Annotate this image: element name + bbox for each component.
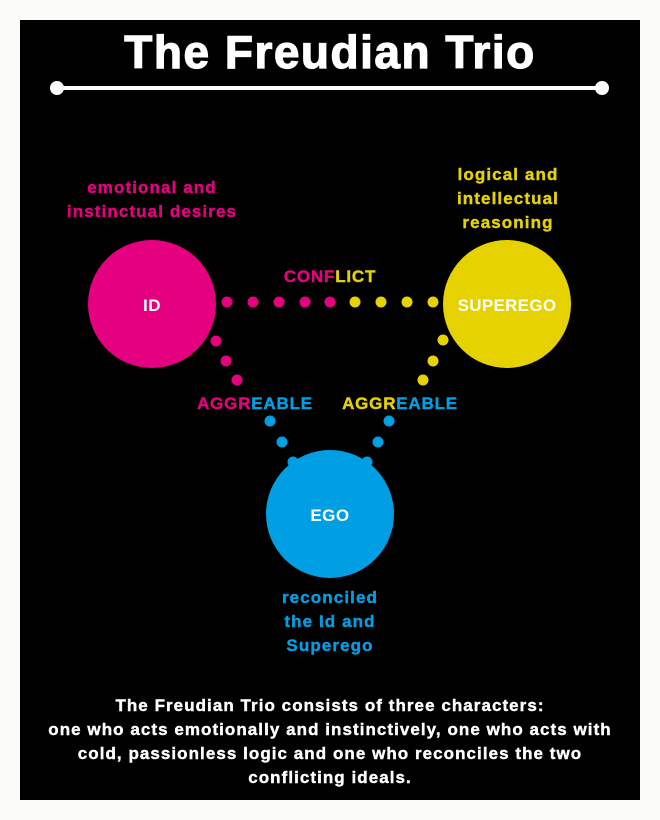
text: caption: cold, passionless logic and one who reconciles the two [78,744,582,763]
title underline [50,81,609,95]
circle: EGO [266,450,394,578]
left aggreable dots [210,336,298,468]
circle: EGO: EGO [310,506,350,525]
text: caption: The Freudian Trio consists of three characters: [115,696,545,715]
label: left aggreable: AGGREABLE [197,394,313,413]
circle: ID [88,240,216,368]
text: superego description: intellectual [457,189,559,208]
right aggreable dots [362,334,448,468]
title: The Freudian Trio [124,26,536,78]
label: conflict: CONFLICT [284,267,376,286]
circle: SUPEREGO [443,240,571,368]
text: id description: emotional and [87,178,217,197]
label: right aggreable: AGGREABLE [342,394,458,413]
text: ego description: the Id and [284,612,376,631]
circle: SUPEREGO: SUPEREGO [458,296,556,315]
circle: ID: ID [143,296,161,315]
text: ego description: reconciled [282,588,378,607]
text: caption: conflicting ideals. [248,768,412,787]
text: id description: instinctual desires [67,202,237,221]
text: caption: one who acts emotionally and instinctively, one who acts with [48,720,612,739]
text: ego description: Superego [286,636,374,655]
conflict dots [222,296,438,308]
text: superego description: logical and [458,165,558,184]
text: superego description: reasoning [462,213,554,232]
